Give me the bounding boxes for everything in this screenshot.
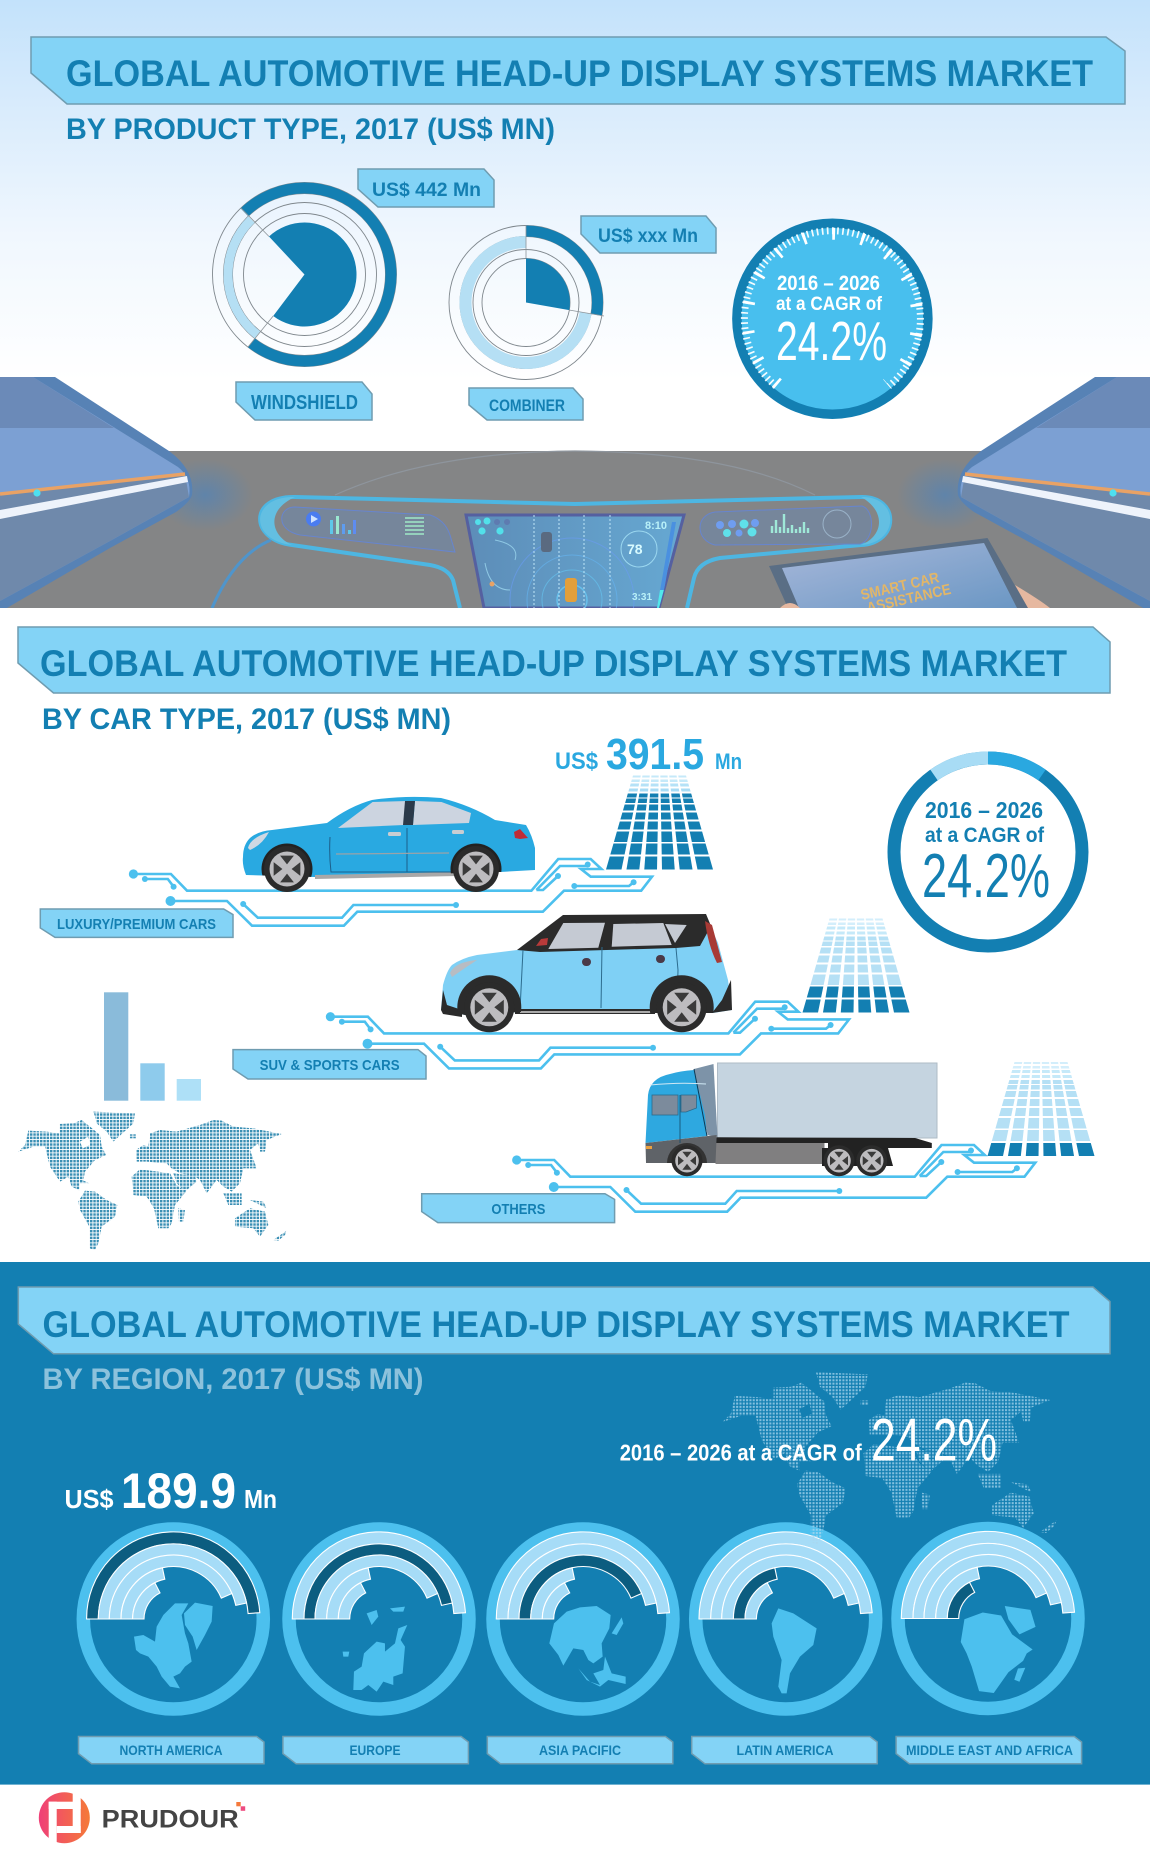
region: North America bbox=[78, 1529, 264, 1764]
panel: region background bbox=[0, 1262, 1150, 1785]
grid: SUV value bars bbox=[802, 918, 910, 1012]
gauge: CAGR 24.2%: at a CAGR of bbox=[776, 294, 883, 315]
label: windshield: WINDSHIELD bbox=[251, 392, 358, 414]
tablet bbox=[769, 538, 1050, 608]
value: US$ 189.9 Mn: 189.9 bbox=[121, 1463, 236, 1519]
label: windshield bbox=[236, 382, 372, 420]
map: dotted world map bbox=[18, 1112, 287, 1250]
callout: region CAGR bbox=[620, 1406, 997, 1474]
value: US$ 391.5 Mn: Mn bbox=[715, 749, 742, 774]
circuit lines: luxury bbox=[129, 859, 652, 926]
label: others bbox=[422, 1194, 615, 1223]
label: others: OTHERS bbox=[491, 1201, 545, 1218]
circuit lines: SUV bbox=[326, 1002, 849, 1068]
gauge: CAGR 24.2%: 2016 – 2026 bbox=[777, 272, 880, 295]
region: Europe bbox=[283, 1529, 469, 1764]
ring callout: CAGR 24.2% bbox=[894, 758, 1082, 946]
grid: others value bars bbox=[988, 1062, 1094, 1156]
banner: car type title bbox=[18, 627, 1110, 693]
label: luxury/premium cars: LUXURY/PREMIUM CARS bbox=[57, 916, 216, 933]
ring callout: CAGR 24.2%: 24.2% bbox=[922, 842, 1050, 911]
gauge: CAGR 24.2% bbox=[737, 223, 928, 414]
region: Middle East and Africa bbox=[896, 1528, 1082, 1764]
region: North America: NORTH AMERICA bbox=[120, 1742, 222, 1758]
callout: US$ 442 Mn bbox=[358, 169, 494, 207]
grid: luxury value bars bbox=[606, 776, 713, 870]
callout: US$ xxx Mn bbox=[581, 216, 716, 253]
region: Latin America bbox=[692, 1529, 877, 1764]
subtitle: by product type: BY PRODUCT TYPE, 2017 (US$ MN) bbox=[66, 113, 555, 146]
ring callout: CAGR 24.2%: 2016 – 2026 bbox=[925, 797, 1043, 823]
tablet: SMART CAR bbox=[859, 569, 941, 604]
centre screen: 8:10 bbox=[645, 520, 667, 532]
banner: car type title: GLOBAL AUTOMOTIVE HEAD-UP DISPLAY SYSTEMS MARKET bbox=[40, 643, 1067, 684]
region: Europe: EUROPE bbox=[350, 1742, 400, 1758]
steering arcs bbox=[212, 540, 271, 608]
centre screen: 3:31 bbox=[632, 592, 652, 603]
map: dotted world map, region panel bbox=[722, 1372, 1056, 1544]
tablet: ASSISTANCE bbox=[865, 581, 953, 617]
chart: combiner radial donut bbox=[449, 225, 604, 380]
region: Latin America: LATIN AMERICA bbox=[736, 1742, 834, 1758]
label: combiner: COMBINER bbox=[489, 396, 565, 415]
banner: product type title bbox=[31, 37, 1125, 104]
label: suv and sports cars: SUV & SPORTS CARS bbox=[260, 1057, 400, 1074]
circuit lines: others bbox=[512, 1145, 1035, 1212]
left side window bbox=[0, 377, 192, 612]
banner: region title bbox=[18, 1287, 1110, 1354]
callout: US$ 442 Mn: US$ 442 Mn bbox=[372, 180, 481, 201]
left display panel bbox=[282, 507, 455, 552]
centre screen bbox=[464, 514, 686, 608]
value: US$ 189.9 Mn bbox=[64, 1463, 277, 1519]
callout: region CAGR: 24.2% bbox=[871, 1406, 997, 1474]
value: US$ 391.5 Mn: US$ bbox=[555, 748, 599, 775]
banner: region title: GLOBAL AUTOMOTIVE HEAD-UP DISPLAY SYSTEMS MARKET bbox=[42, 1304, 1070, 1345]
icon: SUV car bbox=[441, 914, 732, 1039]
illustration: car dashboard interior bbox=[0, 377, 1150, 608]
ring callout: CAGR 24.2%: at a CAGR of bbox=[925, 824, 1045, 847]
bezel bbox=[260, 497, 890, 608]
centre screen: 78 bbox=[627, 541, 643, 557]
value: US$ 189.9 Mn: US$ bbox=[64, 1484, 114, 1514]
callout: US$ xxx Mn: US$ xxx Mn bbox=[598, 226, 698, 247]
chart: windshield radial donut bbox=[212, 182, 396, 366]
logo: Prudour: PRUDOUR bbox=[102, 1805, 239, 1833]
label: luxury/premium cars bbox=[40, 909, 233, 937]
region: Middle East and Africa: MIDDLE EAST AND AFRICA bbox=[906, 1742, 1073, 1758]
region: Asia Pacific bbox=[487, 1529, 673, 1764]
logo: Prudour bbox=[39, 1791, 245, 1844]
right side window bbox=[958, 377, 1150, 612]
value: US$ 391.5 Mn: 391.5 bbox=[606, 730, 704, 779]
subtitle: by car type: BY CAR TYPE, 2017 (US$ MN) bbox=[42, 703, 451, 736]
right display panel bbox=[700, 506, 872, 545]
icon: truck bbox=[646, 1063, 937, 1176]
label: combiner bbox=[469, 388, 583, 420]
value: US$ 189.9 Mn: Mn bbox=[244, 1484, 277, 1514]
gauge: CAGR 24.2%: 24.2% bbox=[776, 310, 887, 372]
subtitle: by region: BY REGION, 2017 (US$ MN) bbox=[42, 1363, 424, 1396]
callout: region CAGR: 2016 – 2026 at a CAGR of bbox=[620, 1440, 862, 1466]
value: US$ 391.5 Mn bbox=[555, 730, 742, 779]
label: suv and sports cars bbox=[233, 1050, 426, 1079]
region: Asia Pacific: ASIA PACIFIC bbox=[539, 1742, 621, 1758]
bar chart: decorative three bars bbox=[104, 992, 201, 1101]
banner: product type title: GLOBAL AUTOMOTIVE HEAD-UP DISPLAY SYSTEMS MARKET bbox=[66, 53, 1093, 94]
icon: sedan car bbox=[243, 797, 535, 894]
